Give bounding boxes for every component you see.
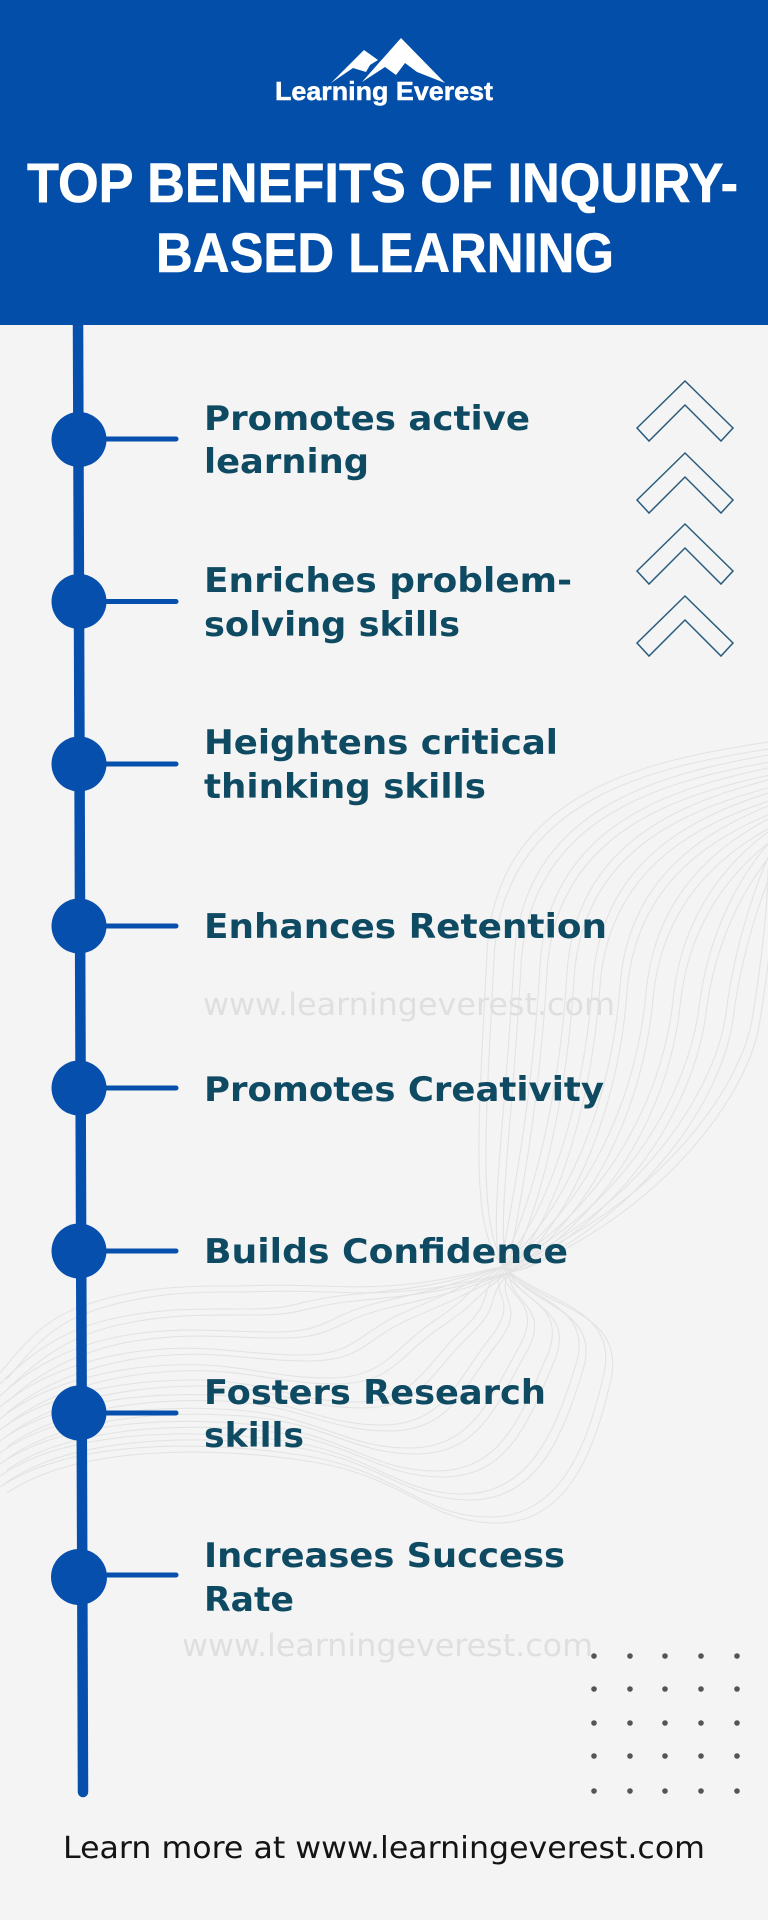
label: skills: [204, 1416, 304, 1455]
benefit 1: [52, 399, 530, 481]
label: Heightens critical: [204, 723, 558, 762]
label: solving skills: [204, 605, 460, 644]
label: Promotes Creativity: [204, 1070, 604, 1109]
label: [204, 399, 530, 481]
dot grid: [591, 1653, 740, 1794]
node: [51, 1549, 107, 1605]
benefit 2: [52, 561, 572, 644]
label: thinking skills: [204, 767, 486, 806]
header background: [0, 0, 768, 325]
node: [52, 736, 106, 792]
node: [52, 1386, 106, 1440]
connector: [104, 924, 176, 928]
connector: [104, 1248, 176, 1254]
timeline vertical line: [78, 320, 83, 1792]
icon: mountain peaks: [331, 38, 445, 83]
label: Increases Success: [204, 1536, 565, 1575]
benefit 4: [52, 898, 607, 954]
benefit 3: [52, 723, 558, 806]
node: [52, 1060, 106, 1116]
label: Enhances Retention: [204, 907, 607, 946]
label: [204, 1373, 546, 1455]
label: [204, 561, 572, 644]
node: [52, 1224, 106, 1278]
connector: [104, 762, 176, 766]
header band: [0, 0, 768, 325]
label: Fosters Research: [204, 1373, 546, 1412]
title: [27, 151, 738, 284]
watermark url 2: www.learningeverest.com: [182, 1628, 593, 1664]
label: Builds Confidence: [204, 1232, 568, 1271]
label: [204, 1536, 565, 1619]
connector: [104, 436, 176, 442]
title: BASED LEARNING: [156, 221, 614, 284]
label: Enriches problem-: [204, 561, 572, 600]
node: [52, 412, 106, 467]
benefit 7: [52, 1373, 546, 1455]
logo wordmark: Learning Everest: [275, 76, 493, 106]
label: [204, 723, 558, 806]
connector: [104, 1572, 176, 1578]
node: [52, 898, 106, 954]
benefit 5: [52, 1060, 604, 1116]
connector: [104, 599, 176, 604]
benefit 8: [51, 1536, 565, 1619]
watermark url: www.learningeverest.com: [203, 987, 615, 1023]
footer call to action: Learn more at www.learningeverest.com: [63, 1831, 705, 1866]
label: learning: [204, 442, 369, 481]
benefit 6: [52, 1224, 568, 1278]
node: [52, 574, 106, 629]
connector: [104, 1086, 176, 1090]
connector: [104, 1410, 176, 1416]
logo: Learning Everest: [275, 38, 493, 106]
decorative chevrons: [637, 381, 733, 656]
label: Promotes active: [204, 399, 530, 438]
label: Rate: [204, 1580, 294, 1619]
title: TOP BENEFITS OF INQUIRY-: [27, 151, 738, 214]
